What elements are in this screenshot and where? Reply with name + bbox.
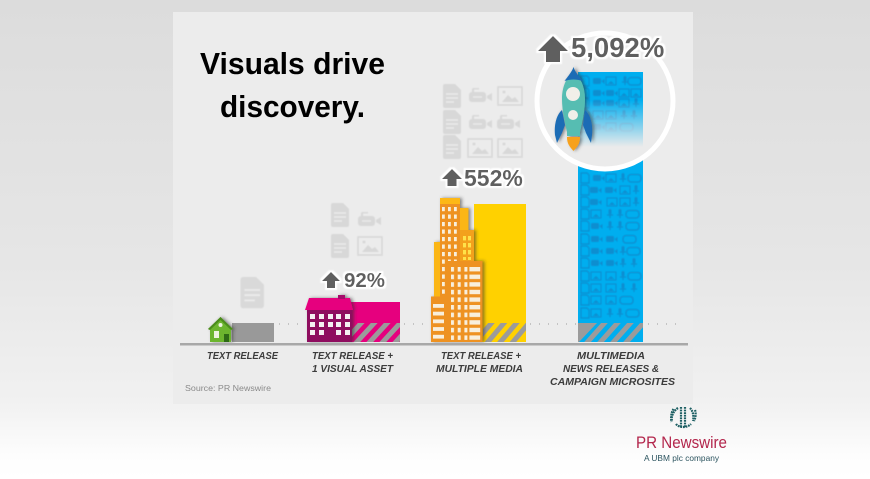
label: text release + 1 visual asset: TEXT RELEASE + xyxy=(312,350,393,362)
icon: rocket xyxy=(555,67,592,151)
hatch xyxy=(352,323,400,342)
icon: document, text release xyxy=(240,277,264,308)
bar: 1 visual asset xyxy=(305,292,400,343)
label: text release + 1 visual asset: 1 VISUAL ASSET xyxy=(312,363,395,375)
label: text release: TEXT RELEASE xyxy=(207,350,279,362)
stat: 552%: 552% xyxy=(464,165,523,191)
hatch xyxy=(483,323,526,342)
bar: multiple media xyxy=(431,198,532,346)
icons: 1 visual asset xyxy=(331,203,382,258)
logo mark xyxy=(671,407,696,427)
label: multimedia: MULTIMEDIA xyxy=(577,350,645,362)
label: text release + multiple media: MULTIPLE MEDIA xyxy=(436,363,523,375)
icon: pink building xyxy=(305,295,353,342)
icon: green house xyxy=(208,317,233,342)
baseline xyxy=(180,343,688,346)
dotted connectors xyxy=(279,323,678,325)
magnifier circle xyxy=(534,30,676,172)
title: Visuals drive xyxy=(200,46,385,81)
label: text release + multiple media: TEXT RELEASE + xyxy=(441,350,521,362)
bar media icons xyxy=(581,76,641,318)
stat: 92% xyxy=(322,269,385,292)
logo wordmark: PR Newswire xyxy=(636,434,727,452)
stat: 92%: 92% xyxy=(344,269,385,292)
label: multimedia: CAMPAIGN MICROSITES xyxy=(550,376,675,388)
hatch xyxy=(578,323,643,342)
logo: PR Newswire xyxy=(636,407,727,463)
icons: multiple media xyxy=(443,84,522,159)
bar: multimedia xyxy=(578,72,647,346)
icon: orange skyscraper xyxy=(431,198,482,342)
label: multimedia: NEWS RELEASES & xyxy=(563,363,659,375)
panel: infographic xyxy=(173,12,693,404)
source note: Source: PR Newswire xyxy=(185,383,271,393)
stat: 5,092%: 5,092% xyxy=(571,32,664,63)
bar: text release xyxy=(208,317,274,342)
logo tagline: A UBM plc company xyxy=(644,453,720,463)
title line 2: discovery. xyxy=(220,89,365,124)
